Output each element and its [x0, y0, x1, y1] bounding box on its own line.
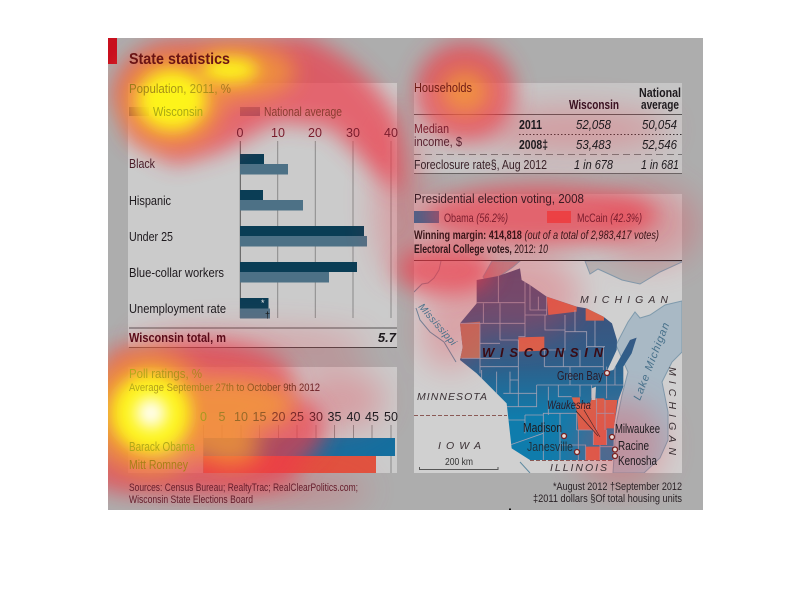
- legend: population: [153, 105, 342, 119]
- McCain counties: [460, 297, 617, 460]
- table: households: 2011: [519, 118, 542, 132]
- map labels: MINNESOTA: [417, 391, 487, 403]
- panel: poll ratings: [128, 367, 397, 473]
- heading: poll ratings: Poll ratings, %: [129, 366, 202, 381]
- map labels: [416, 294, 678, 474]
- table: households: 1 in 678: [574, 158, 613, 172]
- title: State statistics: [129, 51, 230, 68]
- axis labels: poll: 10: [234, 410, 248, 424]
- row labels: population: Under 25: [129, 230, 173, 244]
- table: households: 2008‡: [519, 138, 548, 152]
- panel: households: [414, 83, 682, 174]
- county lines: [460, 276, 623, 460]
- map labels: Mississippi: [416, 302, 459, 349]
- axis labels: population: 10: [271, 126, 285, 140]
- legend: election: [444, 211, 642, 225]
- map labels: Racine: [618, 439, 649, 453]
- axis labels: poll: 35: [328, 410, 341, 424]
- axis labels: poll: 20: [272, 410, 285, 424]
- heatmap overlay: [80, 36, 700, 505]
- legend: population: National average: [264, 105, 342, 119]
- map labels: IOWA: [438, 440, 481, 452]
- sources: Wisconsin State Elections Board: [129, 494, 253, 506]
- axis labels: poll: 50: [384, 410, 398, 424]
- map labels: Milwaukee: [615, 422, 660, 436]
- legend: election: McCain (42.3%): [577, 211, 642, 225]
- table: households: 52,058: [576, 118, 611, 132]
- row labels: poll: Barack Obama: [129, 440, 195, 454]
- lakes: [483, 261, 682, 473]
- map labels: Lake Michigan: [632, 321, 672, 402]
- footnotes: *August 2012 †September 2012: [553, 481, 682, 493]
- row labels: population: Blue-collar workers: [129, 266, 224, 280]
- row labels: poll: Mitt Romney: [129, 458, 189, 472]
- axis labels: poll: 40: [347, 410, 360, 424]
- table: households: Foreclosure rate§, Aug 2012: [414, 158, 547, 172]
- axis labels: poll: [200, 410, 398, 424]
- row labels: population: *: [261, 298, 265, 308]
- map labels: Green Bay: [557, 369, 604, 383]
- axis labels: population: 0: [237, 126, 244, 140]
- state shape: [460, 268, 637, 460]
- legend: population: Wisconsin: [153, 105, 203, 119]
- axis labels: poll: 25: [290, 410, 304, 424]
- legend swatches: election: [414, 211, 571, 223]
- row labels: population: Black: [129, 157, 156, 171]
- map labels: Kenosha: [618, 454, 657, 468]
- map labels: Madison: [523, 421, 562, 435]
- map labels: 200 km: [445, 457, 473, 468]
- map labels: MICHIGAN: [580, 294, 668, 306]
- table: households: [414, 86, 681, 172]
- bar chart: population: [240, 141, 391, 318]
- table: households: 52,546: [642, 138, 677, 152]
- table: households: average: [641, 98, 679, 112]
- map labels: ILLINOIS: [550, 462, 607, 474]
- axis labels: poll: 5: [219, 410, 226, 424]
- map labels: Janesville: [527, 440, 573, 454]
- axis labels: population: 20: [308, 126, 322, 140]
- red corner tab: [108, 38, 117, 64]
- table: households: 1 in 681: [641, 158, 679, 172]
- axis labels: poll: 30: [309, 410, 323, 424]
- map labels: WISCONSIN: [482, 345, 604, 360]
- map: Wisconsin counties: [414, 261, 682, 473]
- table: households: 53,483: [576, 138, 611, 152]
- footnotes: ‡2011 dollars §Of total housing units: [533, 493, 682, 505]
- text: winning margin: Winning margin: 414,818 (out of a total of 2,983,417 votes): [414, 230, 659, 242]
- subheading: poll dates: Average September 27th to October 9th 2012: [129, 382, 320, 394]
- row labels: population: Hispanic: [129, 194, 171, 208]
- total row: 5.7: [378, 330, 397, 345]
- sources: Sources: Census Bureau; RealtyTrac; RealClearPolitics.com;: [129, 482, 358, 494]
- row labels: population: [129, 157, 270, 320]
- heading: population: Population, 2011, %: [129, 81, 231, 96]
- axis labels: population: 30: [346, 126, 360, 140]
- axis labels: population: 40: [384, 126, 398, 140]
- rivers: [414, 261, 530, 473]
- legend: election: Obama (56.2%): [444, 211, 508, 225]
- axis labels: poll: 45: [365, 410, 379, 424]
- text: electoral college: Electoral College votes, 2012: 10: [414, 244, 548, 256]
- table: households: 50,054: [642, 118, 677, 132]
- heading: presidential election: Presidential election voting, 2008: [414, 191, 584, 206]
- infographic background: [108, 38, 703, 510]
- scale bar: [420, 467, 498, 470]
- city markers: [562, 370, 618, 458]
- row labels: population: †: [265, 310, 270, 320]
- axis labels: poll: 15: [253, 410, 266, 424]
- sources: [129, 482, 358, 506]
- small mark: [509, 508, 511, 510]
- table: households: Wisconsin: [569, 98, 619, 112]
- legend swatches: [129, 107, 260, 116]
- table: households: National: [639, 86, 681, 100]
- map labels: MICHIGAN: [666, 367, 678, 455]
- row labels: poll: [129, 440, 195, 472]
- bar chart: poll ratings: [204, 425, 395, 473]
- Waukesha leader lines: [576, 410, 600, 437]
- heading: households: Households: [414, 80, 472, 95]
- state borders: [414, 416, 614, 460]
- total row: [129, 330, 397, 345]
- axis labels: poll: 0: [200, 410, 207, 424]
- table: households: Median: [414, 122, 449, 136]
- map labels: Waukesha: [547, 400, 591, 412]
- axis labels: population: [237, 126, 398, 140]
- total row: Wisconsin total, m: [129, 330, 226, 345]
- panel: presidential election: [414, 194, 682, 473]
- table: households: income, $: [414, 135, 462, 149]
- footnotes: [533, 481, 682, 505]
- row labels: population: Unemployment rate: [129, 302, 226, 316]
- panel: population: [128, 83, 397, 348]
